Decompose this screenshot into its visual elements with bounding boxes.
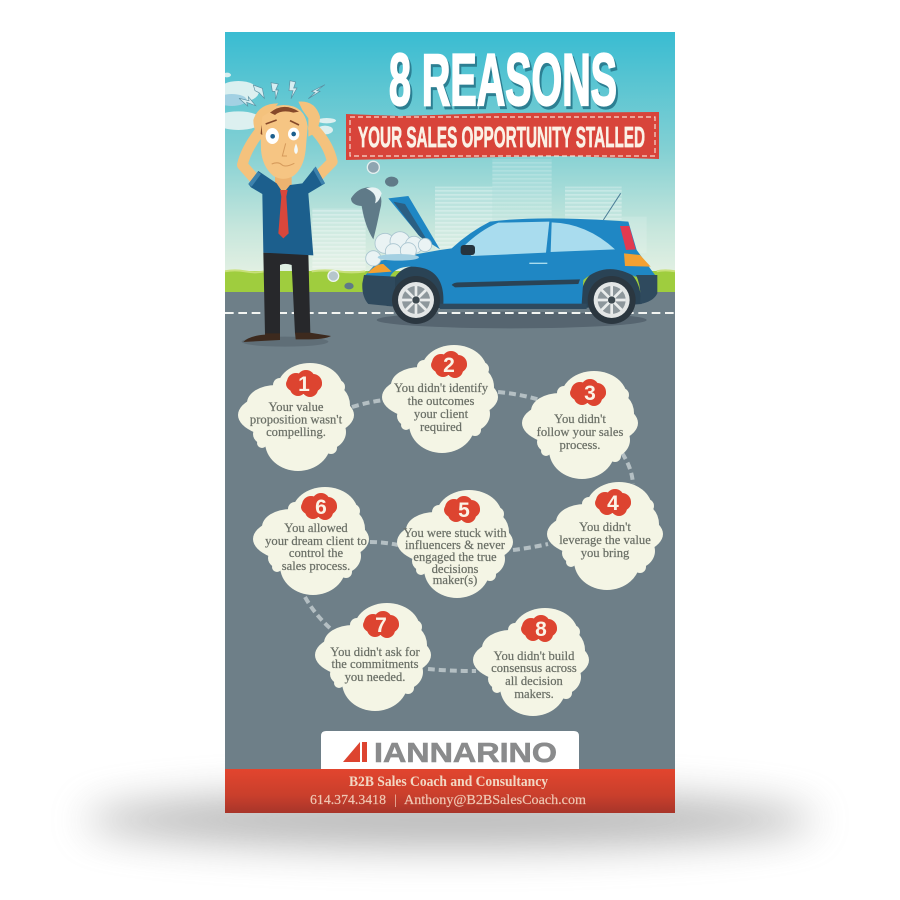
reason 4: leverage the value bbox=[559, 533, 651, 547]
tie bbox=[278, 190, 289, 238]
reason 5: engaged the true bbox=[413, 550, 497, 564]
lights bbox=[620, 226, 636, 250]
mirror bbox=[461, 245, 475, 255]
logo: IANNARINO bbox=[374, 737, 557, 768]
wheel arches bbox=[387, 266, 642, 308]
reason 4: 4 bbox=[607, 492, 619, 515]
lightning bolts bbox=[239, 81, 325, 106]
reason 6: You allowed bbox=[284, 521, 348, 535]
reason 2 bbox=[382, 345, 498, 453]
reason 7: you needed. bbox=[345, 670, 405, 684]
reason 4: you bring bbox=[581, 546, 630, 560]
engine steam bbox=[366, 232, 432, 266]
arms bbox=[242, 128, 332, 179]
reason 3: 3 bbox=[584, 382, 596, 405]
reason 1: Your value bbox=[268, 400, 324, 414]
reason 5: decisions bbox=[432, 562, 479, 576]
subtitle banner bbox=[346, 112, 659, 160]
reason 1: proposition wasn't bbox=[250, 412, 343, 426]
street scene illustration bbox=[214, 73, 675, 347]
reason 6: 6 bbox=[315, 496, 327, 519]
buildings skyline bbox=[312, 159, 647, 272]
reason 5: 5 bbox=[458, 499, 470, 522]
reason 8: all decision bbox=[505, 674, 564, 688]
mouth and nose bbox=[272, 143, 294, 166]
logo bbox=[321, 731, 579, 772]
reason 5: influencers & never bbox=[405, 538, 506, 552]
neck bbox=[275, 176, 292, 190]
car body bbox=[364, 218, 655, 304]
reason 6: sales process. bbox=[282, 559, 350, 573]
trousers bbox=[263, 253, 310, 334]
eyes bbox=[266, 128, 279, 144]
door handle bbox=[529, 262, 548, 264]
title: 8 REASONS bbox=[389, 40, 617, 121]
shoes bbox=[243, 333, 331, 342]
clouds in sky bbox=[214, 73, 336, 134]
drop shadow bbox=[85, 792, 815, 848]
reason 5 bbox=[397, 490, 513, 598]
reason 7: 7 bbox=[375, 614, 387, 637]
reason 3: follow your sales bbox=[537, 425, 623, 439]
reason 7: You didn't ask for bbox=[330, 645, 421, 659]
reason 3: process. bbox=[560, 438, 600, 452]
reason 2: the outcomes bbox=[408, 394, 474, 408]
reason 8: makers. bbox=[514, 687, 554, 701]
reason 6: control the bbox=[289, 546, 344, 560]
reason 1: compelling. bbox=[266, 425, 326, 439]
grass trim bbox=[225, 270, 675, 272]
eyebrows bbox=[266, 120, 299, 125]
shirt bbox=[248, 167, 325, 255]
subtitle banner: YOUR SALES OPPORTUNITY STALLED bbox=[358, 122, 645, 154]
footer contact band: 614.374.3418 bbox=[310, 793, 386, 808]
reason 8: 8 bbox=[535, 618, 547, 641]
wheels bbox=[392, 276, 636, 324]
title bbox=[389, 40, 619, 124]
grey smoke bbox=[328, 161, 398, 289]
head bbox=[260, 105, 308, 179]
sweat drop bbox=[294, 143, 298, 154]
footer contact band: B2B Sales Coach and Consultancy bbox=[349, 774, 549, 790]
reason 6: your dream client to bbox=[265, 534, 367, 548]
reason 5: You were stuck with bbox=[403, 526, 507, 540]
door trim bbox=[452, 279, 580, 287]
title: 8 REASONS bbox=[391, 43, 619, 124]
hair bbox=[270, 107, 299, 115]
reason 8: consensus across bbox=[491, 661, 577, 675]
reason 8: You didn't build bbox=[494, 649, 575, 663]
hands bbox=[253, 102, 320, 137]
bumpers bbox=[362, 275, 657, 307]
reason 1 bbox=[238, 363, 354, 471]
reason 6 bbox=[253, 487, 369, 595]
poster background bbox=[225, 32, 675, 772]
reason 4 bbox=[547, 482, 663, 590]
road centre line bbox=[225, 312, 674, 314]
windows bbox=[462, 222, 549, 256]
man shadow bbox=[242, 337, 328, 347]
dashed connectors bbox=[305, 392, 633, 671]
reason 2: 2 bbox=[443, 354, 455, 377]
reason 7: the commitments bbox=[331, 657, 419, 671]
reason 2: required bbox=[420, 420, 463, 434]
reason 5: maker(s) bbox=[433, 573, 477, 587]
infographic poster bbox=[80, 32, 820, 872]
car bbox=[328, 161, 657, 324]
reason 4: You didn't bbox=[579, 520, 631, 534]
reason 2: your client bbox=[414, 407, 469, 421]
car shadow bbox=[377, 312, 647, 328]
reason 3: You didn't bbox=[554, 412, 606, 426]
footer contact band: Anthony@B2BSalesCoach.com bbox=[404, 793, 586, 808]
reason 1: 1 bbox=[298, 373, 310, 396]
reason 2: You didn't identify bbox=[394, 381, 489, 395]
footer contact band bbox=[225, 769, 675, 813]
open hood bbox=[388, 196, 440, 249]
shirt cuffs bbox=[248, 167, 325, 187]
sill bbox=[440, 304, 587, 309]
reason 3 bbox=[522, 371, 638, 479]
footer contact band: | bbox=[394, 793, 397, 808]
reason 8 bbox=[473, 608, 589, 716]
antenna bbox=[603, 193, 621, 220]
reason 7 bbox=[315, 603, 431, 711]
man bbox=[239, 81, 332, 342]
